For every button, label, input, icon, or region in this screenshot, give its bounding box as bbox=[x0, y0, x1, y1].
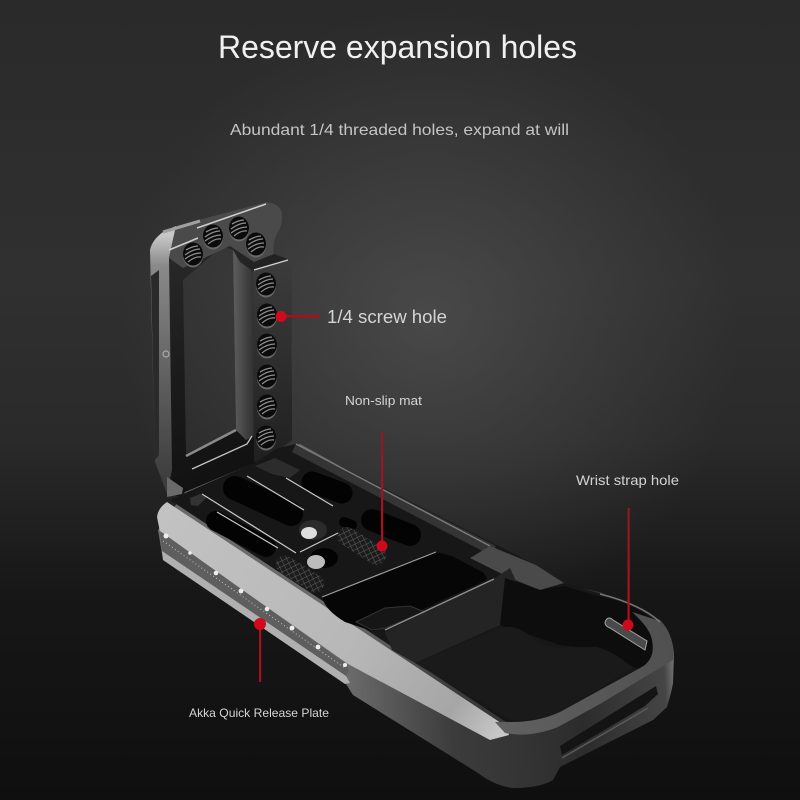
silver top face bbox=[157, 502, 509, 740]
label: Non-slip mat bbox=[345, 393, 422, 408]
arm top face bbox=[169, 202, 282, 268]
callout: non-slip mat bbox=[345, 393, 422, 552]
top threaded holes bbox=[183, 216, 266, 268]
inner bar beside window bbox=[233, 250, 254, 440]
connector line bbox=[628, 508, 630, 624]
product: base plate bbox=[157, 444, 674, 788]
arm slot in side bbox=[151, 270, 159, 460]
title: Reserve expansion holes bbox=[218, 29, 577, 65]
connector line bbox=[381, 432, 383, 545]
ruler scale face bbox=[160, 531, 349, 676]
marker dot bbox=[622, 620, 634, 630]
label: Akka Quick Release Plate bbox=[189, 706, 329, 720]
product: L-bracket upright arm bbox=[150, 202, 292, 498]
plate top face bbox=[170, 444, 672, 725]
label: 1/4 screw hole bbox=[327, 307, 447, 327]
plate side shell bbox=[158, 444, 674, 788]
hole strip face bbox=[253, 259, 292, 462]
marker dot bbox=[254, 618, 266, 630]
plate slot highlights bbox=[202, 476, 338, 553]
callout: wrist strap hole bbox=[576, 472, 679, 630]
arm frame silhouette bbox=[150, 202, 292, 498]
arm silver side face bbox=[150, 226, 176, 494]
marker dot bbox=[276, 311, 286, 322]
engraved logo bbox=[163, 351, 169, 357]
ruler tick marks bbox=[163, 541, 345, 668]
non-slip pads bbox=[272, 524, 390, 596]
open window bbox=[415, 627, 633, 720]
callout: Akka quick release plate bbox=[189, 618, 329, 720]
silver lower strip bbox=[162, 551, 350, 684]
plate slots bbox=[216, 482, 410, 547]
battery recess bbox=[322, 552, 487, 631]
bottom strap slot bbox=[560, 686, 658, 755]
base wedge bbox=[167, 477, 183, 497]
arm top bevel highlight bbox=[169, 204, 266, 250]
callout: 1/4 screw hole bbox=[276, 307, 447, 327]
grip rim bbox=[495, 612, 674, 735]
mounting screws bbox=[299, 520, 338, 569]
wrist strap pin bbox=[605, 618, 647, 650]
subtitle: Abundant 1/4 threaded holes, expand at will bbox=[230, 122, 569, 139]
top edge bevel bbox=[292, 444, 496, 556]
connector line bbox=[282, 315, 320, 318]
grip pocket wall bbox=[500, 578, 668, 670]
small recesses bbox=[190, 458, 300, 506]
label: Wrist strap hole bbox=[576, 472, 679, 488]
cross bar bbox=[385, 568, 525, 663]
connector line bbox=[259, 625, 261, 682]
side threaded holes bbox=[256, 272, 277, 450]
marker dot bbox=[376, 540, 388, 552]
ruler markers bbox=[164, 534, 347, 667]
